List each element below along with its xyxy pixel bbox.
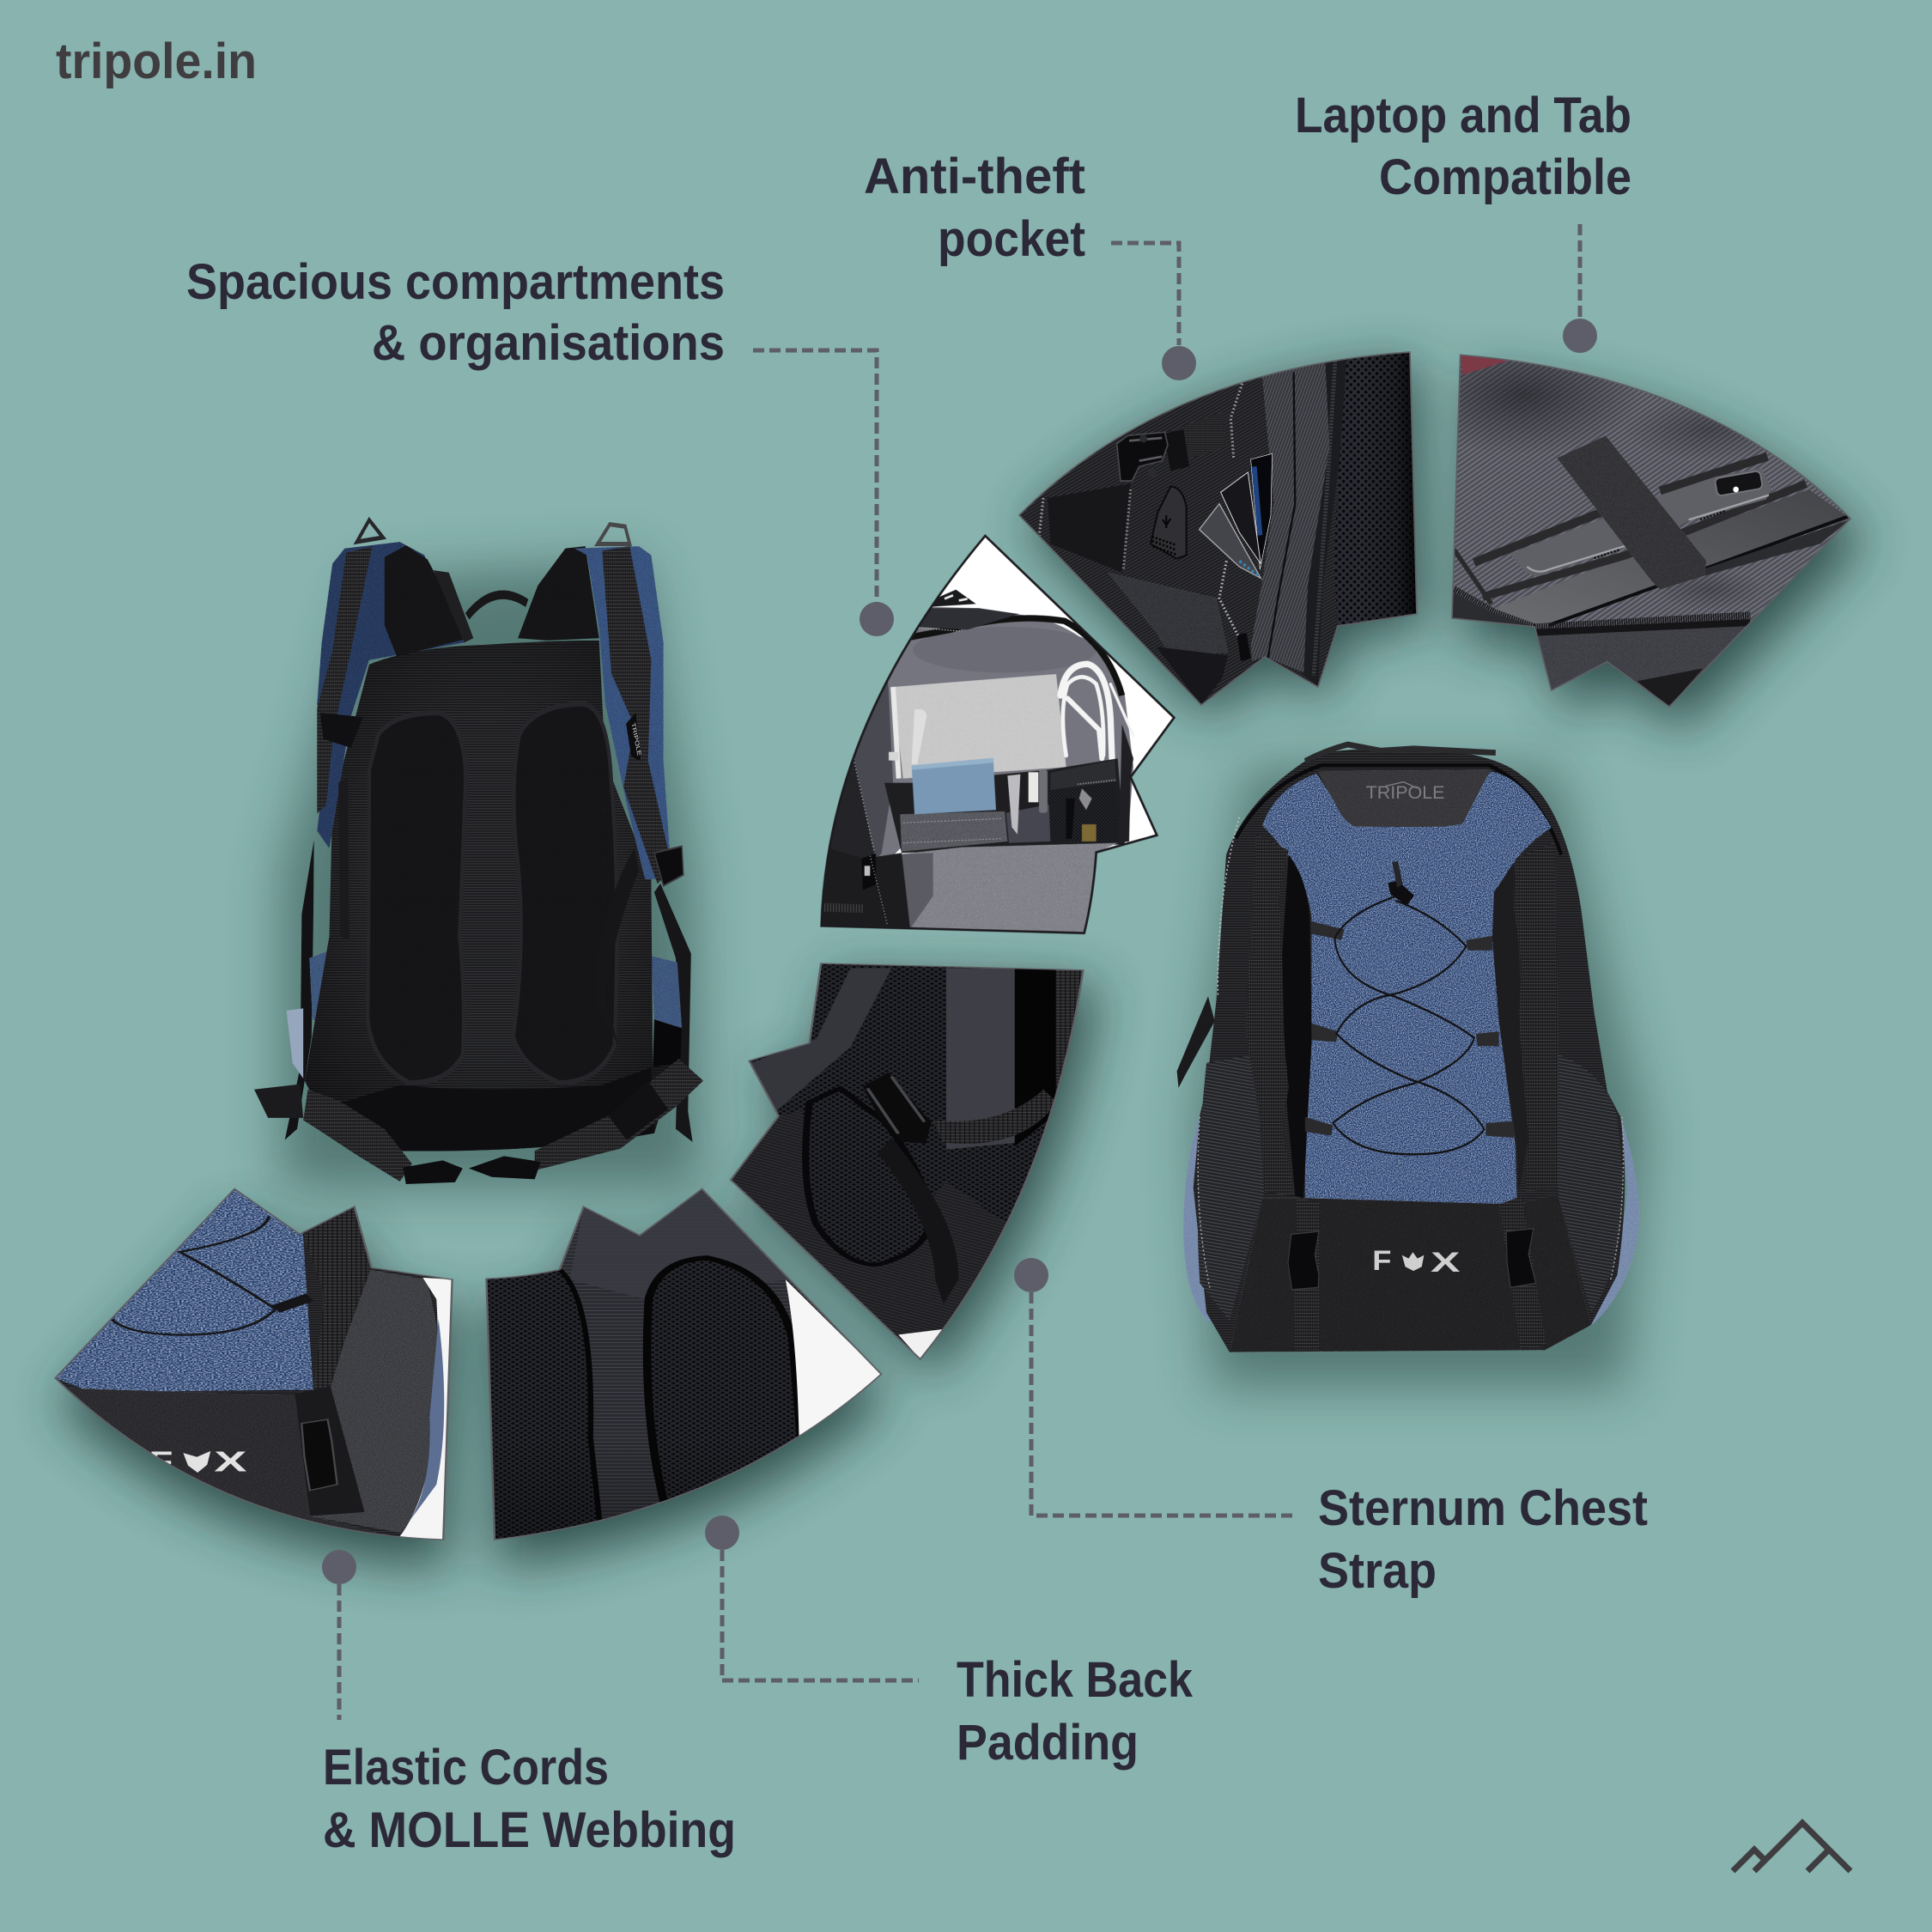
- right MOLLE webbing: [1514, 842, 1558, 1192]
- sternum strap: [933, 1090, 1057, 1144]
- dark lower falloff: [481, 1437, 810, 1544]
- logo: tripole.in: tripole.in: [56, 33, 257, 89]
- back panel: [305, 641, 676, 1151]
- side zippers: [1218, 817, 1239, 996]
- right shoulder strap: [518, 525, 683, 886]
- padded oval: [805, 1089, 933, 1265]
- blue side gussets: [1183, 1115, 1233, 1325]
- gray webbing band: [1251, 359, 1329, 672]
- elastic cord lacing: [1305, 861, 1514, 1154]
- elastic cord: [112, 1217, 276, 1335]
- left shoulder strap: [317, 520, 473, 848]
- callout: anti-theft pocket: pocket: [938, 211, 1085, 267]
- zippers: [1039, 384, 1242, 644]
- elastic band: [1557, 435, 1706, 590]
- left shell: [824, 667, 893, 926]
- strap label: [626, 713, 642, 761]
- callout: spacious compartments: & organisations: [372, 315, 725, 371]
- top of pack with zipper: [824, 607, 1133, 925]
- callout: elastic cords and MOLLE webbing: & MOLLE Webbing: [323, 1802, 736, 1858]
- side straps: [285, 840, 314, 1139]
- drop shadows behind product panels: [58, 364, 1864, 1565]
- left mesh back pad: [368, 713, 465, 1083]
- blue fabric: [55, 1189, 313, 1392]
- FOX logo: [1372, 1246, 1461, 1279]
- right mesh back pad: [513, 704, 617, 1083]
- callout: spacious compartments: [186, 254, 894, 636]
- lower front pocket: [1230, 1194, 1591, 1352]
- panel: sternum chest strap close-up: T: [1070, 1039, 1077, 1047]
- panel: thick back padding close-up: [481, 1185, 891, 1544]
- main body: [1194, 749, 1625, 1352]
- callout: sternum chest strap: [1014, 1258, 1648, 1599]
- top zipper: [1305, 744, 1496, 761]
- side gray panel: [295, 1267, 442, 1533]
- zipper and lower fabric: [1452, 590, 1752, 707]
- shoulder strap: [751, 969, 891, 1118]
- callout: thick back padding: Thick Back: [957, 1652, 1194, 1708]
- pens: [1007, 770, 1048, 835]
- callout: elastic cords and MOLLE webbing: Elastic Cords: [323, 1740, 609, 1795]
- zipper pull: [1237, 633, 1251, 661]
- FOX logo on pack: X: [214, 1446, 247, 1478]
- top handle: [467, 595, 527, 617]
- notebook: [889, 674, 1066, 779]
- front view of backpack: [1177, 744, 1639, 1352]
- FOX logo: X: [1431, 1248, 1461, 1279]
- left pocket trim: [338, 779, 349, 940]
- compression straps and buckles: [1288, 1196, 1546, 1350]
- leather logo patch: [1318, 769, 1491, 827]
- gray flap: [899, 843, 1118, 933]
- hip belt: [254, 1059, 703, 1184]
- side strap and buckle: [295, 1386, 365, 1516]
- panel: sternum chest strap close-up: [727, 960, 1097, 1363]
- white background corner: [786, 1279, 881, 1443]
- rear view of backpack: [254, 520, 703, 1184]
- right mesh pad: [647, 1258, 801, 1509]
- organiser pocket: [884, 758, 1125, 853]
- chest strap buckle: [863, 1072, 932, 1144]
- mesh strip: [1334, 349, 1419, 627]
- callout: thick back padding: [705, 1516, 1194, 1771]
- cards in pocket: [1200, 453, 1273, 578]
- lower panel: [731, 1110, 1029, 1359]
- callout: sternum chest strap: Strap: [1318, 1543, 1437, 1599]
- herringbone strip: [1301, 358, 1346, 687]
- FOX logo on pack: [149, 1446, 247, 1478]
- left mesh pad: [486, 1270, 601, 1540]
- blue front panel: [1262, 771, 1552, 1205]
- lower black fabric: [64, 1388, 398, 1538]
- callout: sternum chest strap: Sternum Chest: [1318, 1480, 1648, 1536]
- panel: elastic cords and MOLLE webbing close-up: [50, 1185, 460, 1544]
- mesh pocket with tools: [1049, 760, 1119, 844]
- strap with buckle: [1117, 412, 1226, 481]
- anti-theft pocket tag: [1151, 487, 1187, 559]
- callout: laptop and tab compatible: Laptop and Tab: [1295, 88, 1631, 143]
- left MOLLE webbing: [1246, 834, 1295, 1196]
- callout: laptop and tab compatible: Compatible: [1379, 149, 1631, 205]
- lower side pockets: [1198, 1054, 1624, 1321]
- panel: anti-theft pocket close-up: [1016, 349, 1423, 710]
- sleeve edges: [1454, 457, 1806, 604]
- side panels: [309, 950, 332, 1028]
- bottom-left zipper pull: [822, 848, 910, 929]
- callout: anti-theft pocket: [864, 149, 1196, 380]
- callout: elastic cords and MOLLE webbing: [322, 1550, 736, 1858]
- hanging strap over right pad: [596, 848, 639, 1045]
- pull strap left: [1177, 996, 1215, 1088]
- blue power bank: [912, 758, 996, 814]
- callout: thick back padding: Padding: [957, 1715, 1139, 1771]
- FOX logo: F: [1372, 1246, 1392, 1277]
- panel: spacious compartments close-up: [807, 524, 1185, 945]
- leather logo patch: TRIPOLE: [1366, 783, 1445, 804]
- FOX logo on pack: F: [149, 1446, 173, 1478]
- callout: anti-theft pocket: Anti-theft: [864, 149, 1085, 204]
- smartphone: [1510, 468, 1771, 577]
- MOLLE webbing: [303, 1206, 372, 1388]
- icon: mountain logo: [1733, 1823, 1850, 1871]
- callout: spacious compartments: Spacious compartments: [186, 254, 725, 310]
- strap label: TRIPOLE: [630, 722, 642, 756]
- side gusset and white corner: [398, 1278, 453, 1541]
- callout: laptop and tab compatible: [1295, 88, 1631, 353]
- white charging cable: [1060, 664, 1133, 758]
- laptop: [1492, 489, 1850, 627]
- black inner side panels: [1282, 854, 1312, 1198]
- panel: laptop and tablet sleeve close-up: [1451, 354, 1851, 708]
